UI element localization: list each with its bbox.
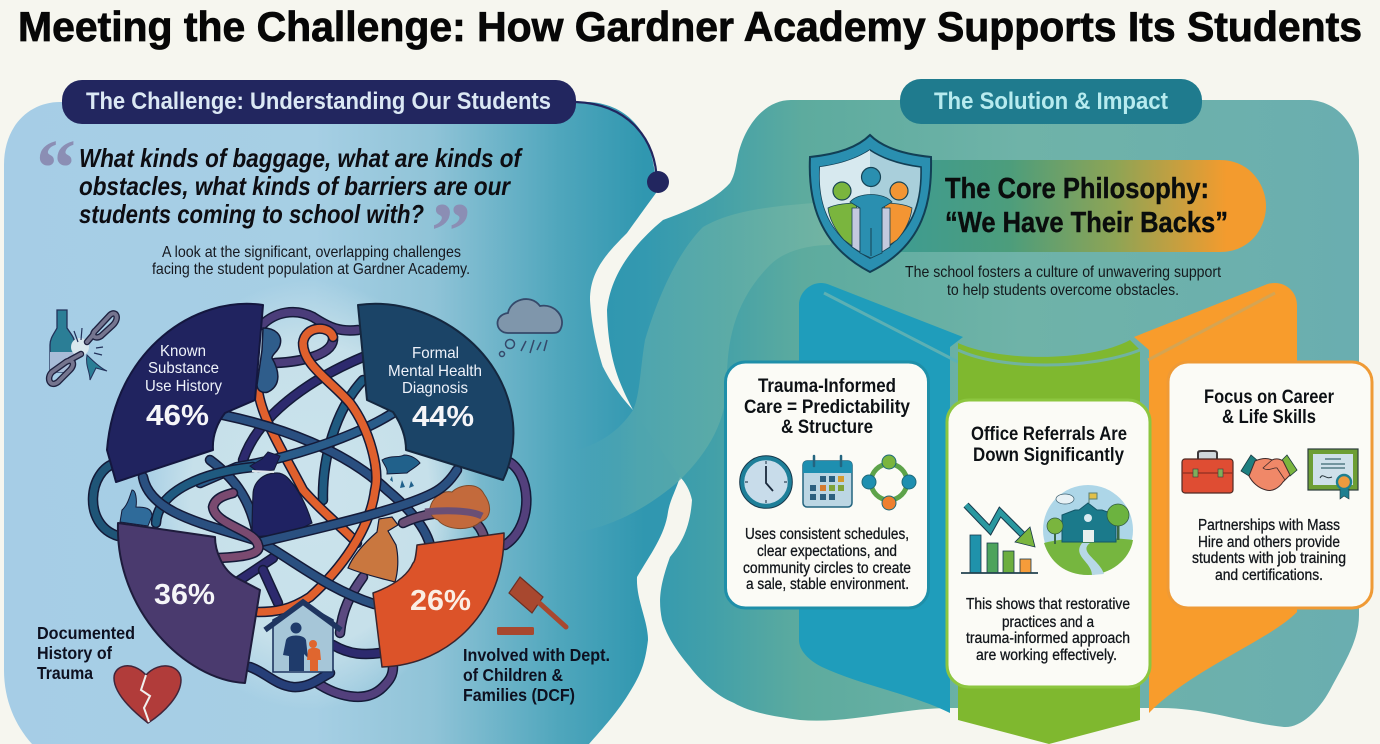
rope: blue strand fill	[261, 470, 457, 542]
rope over brown cloud	[425, 511, 482, 516]
card: trauma-informed care: Trauma-Informed	[758, 376, 896, 397]
icon: school building	[1043, 485, 1133, 575]
segment: trauma	[118, 523, 260, 683]
quote text	[79, 143, 523, 229]
card: career and life skills: and certifications.	[1215, 567, 1323, 584]
segment: mental health: Diagnosis	[402, 380, 468, 397]
quote block	[36, 125, 523, 276]
card: career and life skills: students with job training	[1192, 550, 1346, 567]
icon: family in house	[265, 602, 341, 672]
text: core philosophy description	[905, 264, 1221, 299]
panel: the solution and impact background	[607, 100, 1359, 727]
subheading text: facing the student population at Gardner Academy.	[152, 261, 470, 278]
segment: substance use: 46%	[146, 400, 209, 432]
panel: the challenge background	[4, 102, 720, 744]
central glow	[140, 280, 480, 710]
card: office referrals: practices and a	[1002, 614, 1094, 631]
heading: the solution and impact: The Solution & Impact	[934, 88, 1168, 115]
segment: trauma: 36%	[154, 579, 215, 611]
segment: DCF: 26%	[410, 585, 471, 617]
card: career and life skills	[1168, 362, 1372, 608]
segment: substance use	[107, 304, 263, 482]
icon: thumbs up	[120, 490, 152, 526]
icon: orange bag	[348, 517, 398, 582]
icon: central backpack	[250, 452, 312, 537]
icon: community circle	[862, 455, 916, 510]
segment: substance use: Known	[160, 343, 206, 360]
text: core philosophy description: to help students overcome obstacles.	[947, 282, 1179, 299]
book: open pages	[799, 283, 1297, 744]
card: office referrals: trauma-informed approach	[966, 630, 1130, 647]
card: trauma-informed care: community circles to create	[743, 560, 911, 577]
icon: calendar	[803, 456, 852, 507]
banner: core philosophy: “We Have Their Backs”	[945, 207, 1228, 239]
label: documented history of trauma: Trauma	[37, 663, 93, 683]
icon: declining bar chart	[961, 505, 1038, 573]
chart: overlapping challenges tangle	[93, 280, 526, 710]
segment: substance use: Substance	[148, 360, 219, 377]
label: involved with DCF: Families (DCF)	[463, 685, 575, 705]
card: career and life skills: Focus on Career	[1204, 387, 1335, 408]
label: documented history of trauma: History of	[37, 643, 112, 663]
segment: substance use: Use History	[145, 378, 222, 395]
main title: Meeting the Challenge: How Gardner Academy Supports Its Students	[18, 3, 1362, 50]
card: office referrals: Office Referrals Are	[971, 424, 1127, 445]
icon: certificate	[1308, 449, 1358, 499]
rope: blue strand over backpack	[261, 470, 457, 542]
book page: green ribbon	[958, 340, 1140, 744]
ropes	[93, 312, 526, 697]
challenge panel connector line and dot	[576, 102, 669, 193]
card: office referrals: Down Significantly	[973, 445, 1124, 466]
opening quotation mark: “	[36, 125, 76, 213]
card: career and life skills: Hire and others provide	[1198, 534, 1340, 551]
panel ribbon swoosh	[570, 200, 850, 533]
icon: rain cloud	[497, 299, 562, 356]
card: trauma-informed care: a sale, stable environment.	[746, 576, 909, 593]
card: trauma-informed care: Care = Predictability	[744, 397, 910, 418]
banner: core philosophy: The Core Philosophy:	[945, 173, 1209, 205]
segment: mental health: 44%	[412, 401, 474, 433]
card: trauma-informed care: & Structure	[781, 417, 873, 438]
text: core philosophy description: The school fosters a culture of unwavering support	[905, 264, 1221, 281]
heading: the solution and impact	[900, 79, 1202, 124]
icon: bottle and broken chain	[49, 310, 117, 384]
book page: blue	[799, 283, 963, 713]
icon: handshake	[1241, 455, 1297, 491]
segment: DCF	[373, 533, 504, 667]
segment: mental health: Mental Health	[388, 363, 482, 380]
icon: small storm cloud	[382, 455, 420, 488]
rope: purple squiggle	[213, 493, 258, 558]
heading: the challenge	[62, 80, 576, 124]
card: career and life skills: & Life Skills	[1222, 407, 1316, 428]
card: trauma-informed care: Uses consistent schedules,	[745, 526, 909, 543]
subheading text	[152, 244, 470, 278]
card: trauma-informed care	[726, 362, 928, 608]
icon: brown cloud	[430, 486, 490, 529]
quote text: obstacles, what kinds of barriers are our	[79, 171, 512, 201]
label: involved with DCF	[463, 645, 610, 705]
label: documented history of trauma	[37, 623, 135, 683]
label: involved with DCF: of Children &	[463, 665, 563, 685]
card: career and life skills: Partnerships with Mass	[1198, 517, 1340, 534]
card: office referrals: This shows that restorative	[966, 596, 1130, 613]
quote text: What kinds of baggage, what are kinds of	[79, 143, 523, 173]
icon: blue cloud in tangle	[257, 328, 281, 393]
card: office referrals	[947, 400, 1150, 687]
icon: briefcase	[1182, 451, 1233, 493]
card: trauma-informed care: clear expectations, and	[757, 543, 897, 560]
heading: the challenge: The Challenge: Understanding Our Students	[86, 88, 551, 115]
banner: core philosophy	[870, 160, 1266, 252]
icon: broken heart	[114, 666, 181, 723]
subheading text: A look at the significant, overlapping challenges	[162, 244, 461, 261]
closing quotation mark: ”	[431, 188, 471, 276]
segment: mental health	[358, 304, 513, 480]
book page: orange	[1134, 283, 1297, 713]
segment: mental health: Formal	[412, 345, 459, 362]
icon: shield with figures	[810, 135, 931, 272]
icon: gavel	[497, 577, 566, 635]
label: documented history of trauma: Documented	[37, 623, 135, 643]
card: office referrals: are working effectively.	[976, 647, 1117, 664]
icon: clock	[740, 456, 792, 508]
quote text: students coming to school with?	[79, 199, 424, 229]
label: involved with DCF: Involved with Dept.	[463, 645, 610, 665]
